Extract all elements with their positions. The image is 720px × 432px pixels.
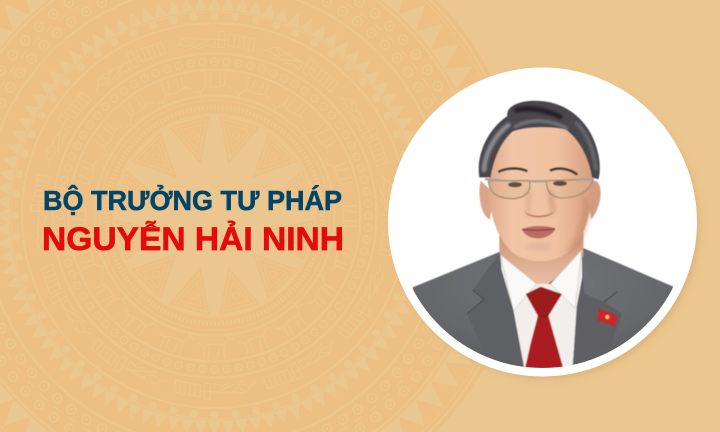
face shading bbox=[525, 190, 592, 253]
eyes bbox=[508, 182, 522, 187]
hair highlights bbox=[484, 109, 596, 170]
right lapel bbox=[573, 247, 622, 366]
neck bbox=[498, 232, 584, 284]
portrait circle bbox=[388, 68, 697, 376]
title bbox=[42, 184, 344, 257]
left lapel bbox=[467, 253, 524, 367]
glasses bbox=[488, 179, 593, 199]
hair bbox=[479, 101, 600, 179]
mouth bbox=[522, 226, 556, 238]
title line: position: BỘ TRƯỞNG TƯ PHÁP bbox=[43, 184, 342, 216]
shirt bbox=[501, 250, 582, 368]
eyebrows bbox=[498, 168, 527, 172]
title line: name: NGUYỄN HẢI NINH bbox=[42, 221, 344, 257]
face bbox=[489, 125, 593, 261]
suit jacket bbox=[413, 247, 673, 370]
necktie bbox=[526, 287, 562, 316]
nose bbox=[525, 211, 554, 218]
ears bbox=[479, 181, 494, 219]
portrait photo illustration bbox=[413, 101, 673, 370]
lapel pin bbox=[597, 309, 617, 326]
